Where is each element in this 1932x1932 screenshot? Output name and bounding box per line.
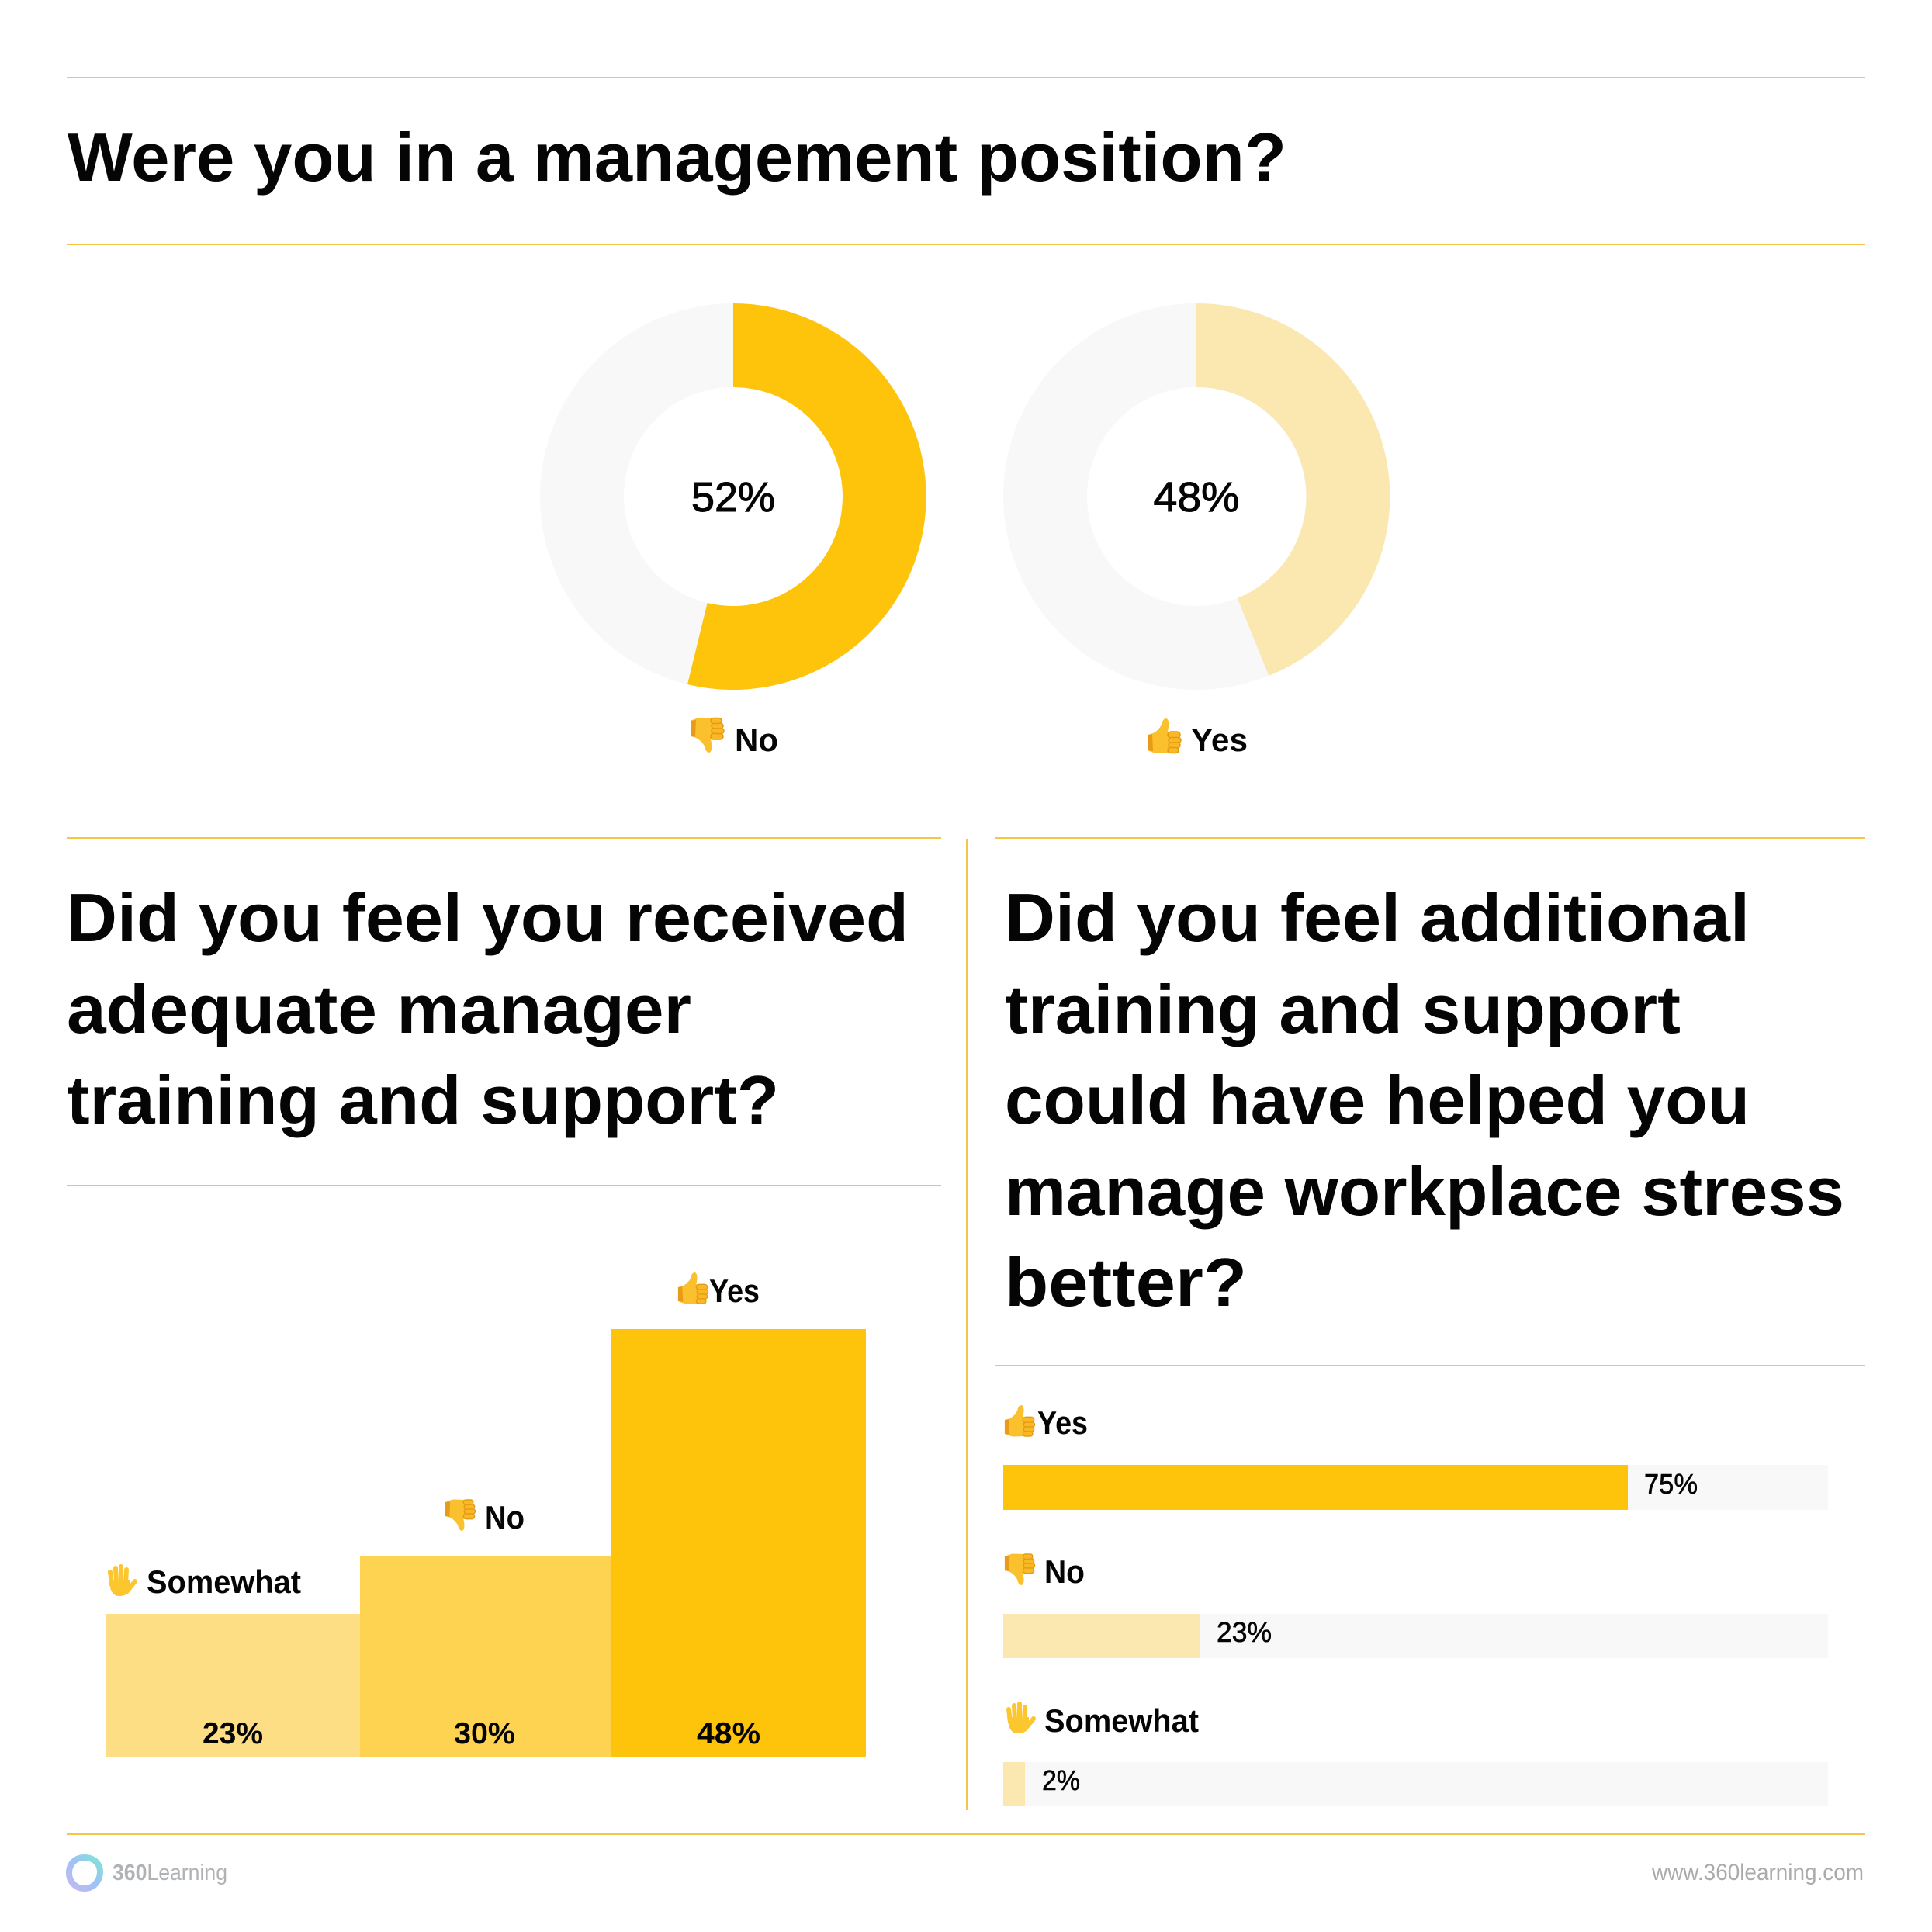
icon: thumbs down [445, 1499, 476, 1531]
bar: Yes 48%: Yes [709, 1272, 760, 1309]
footer logo: 360Learning: 360Learning [113, 1861, 227, 1885]
heading: additional training: better? [1005, 1244, 1247, 1321]
donut chart: No 52%: 52% [691, 474, 775, 521]
heading: manager training [67, 879, 909, 1138]
icon: logo ring [69, 1858, 100, 1889]
bar chart: manager training [106, 1272, 866, 1757]
heading: additional training: manage workplace stress [1005, 1153, 1844, 1230]
label: No [691, 718, 778, 758]
icon: thumbs down [691, 718, 724, 753]
bar: Yes 48% [611, 1272, 866, 1757]
donut chart: Yes 48% [1045, 303, 1390, 676]
icon: thumbs up [1148, 718, 1181, 753]
heading: additional training: could have helped you [1005, 1061, 1750, 1138]
row: Somewhat 2% [1003, 1702, 1828, 1806]
icon: raised hand [109, 1567, 135, 1596]
bar: No 30%: 30% [454, 1717, 515, 1750]
horizontal bar chart: additional training [1003, 1404, 1828, 1806]
bar: Yes 48%: 48% [697, 1717, 760, 1750]
heading: additional training: training and support [1005, 971, 1681, 1047]
bar: Somewhat 23%: 23% [203, 1717, 263, 1750]
icon: thumbs down [1005, 1553, 1035, 1585]
heading: manager training: adequate manager [67, 971, 691, 1047]
row: No 23%: No [1044, 1553, 1085, 1590]
label: Yes [1148, 718, 1248, 758]
panel: management position donuts [582, 303, 1390, 758]
footer logo: 360Learning [69, 1858, 227, 1889]
bar: Somewhat 23%: Somewhat [147, 1563, 301, 1600]
label: No: No [735, 722, 778, 758]
row: Yes 75% [1003, 1404, 1828, 1510]
row: Yes 75%: Yes [1037, 1404, 1088, 1441]
icon: thumbs up [678, 1272, 708, 1304]
icon: raised hand [1007, 1704, 1034, 1733]
bar: No 30% [360, 1499, 611, 1757]
heading: manager training: training and support? [67, 1061, 779, 1138]
row: No 23% [1003, 1553, 1828, 1658]
title: Were you in a management position? [68, 119, 1286, 196]
label: Yes: Yes [1191, 722, 1248, 758]
row: Somewhat 2%: 2% [1042, 1764, 1080, 1796]
icon: thumbs up [1005, 1405, 1035, 1437]
donut chart: Yes 48%: 48% [1153, 474, 1240, 521]
donut chart: No 52% [582, 303, 926, 690]
row: Yes 75%: 75% [1644, 1468, 1698, 1500]
row: Somewhat 2%: Somewhat [1044, 1702, 1199, 1739]
row: No 23%: 23% [1217, 1616, 1272, 1648]
heading: manager training: Did you feel you received [67, 879, 909, 956]
footer url: www.360learning.com [1651, 1860, 1864, 1885]
bar: No 30%: No [485, 1499, 525, 1536]
heading: additional training [1005, 879, 1844, 1321]
heading: additional training: Did you feel additional [1005, 879, 1750, 956]
bar: Somewhat 23% [106, 1563, 360, 1757]
